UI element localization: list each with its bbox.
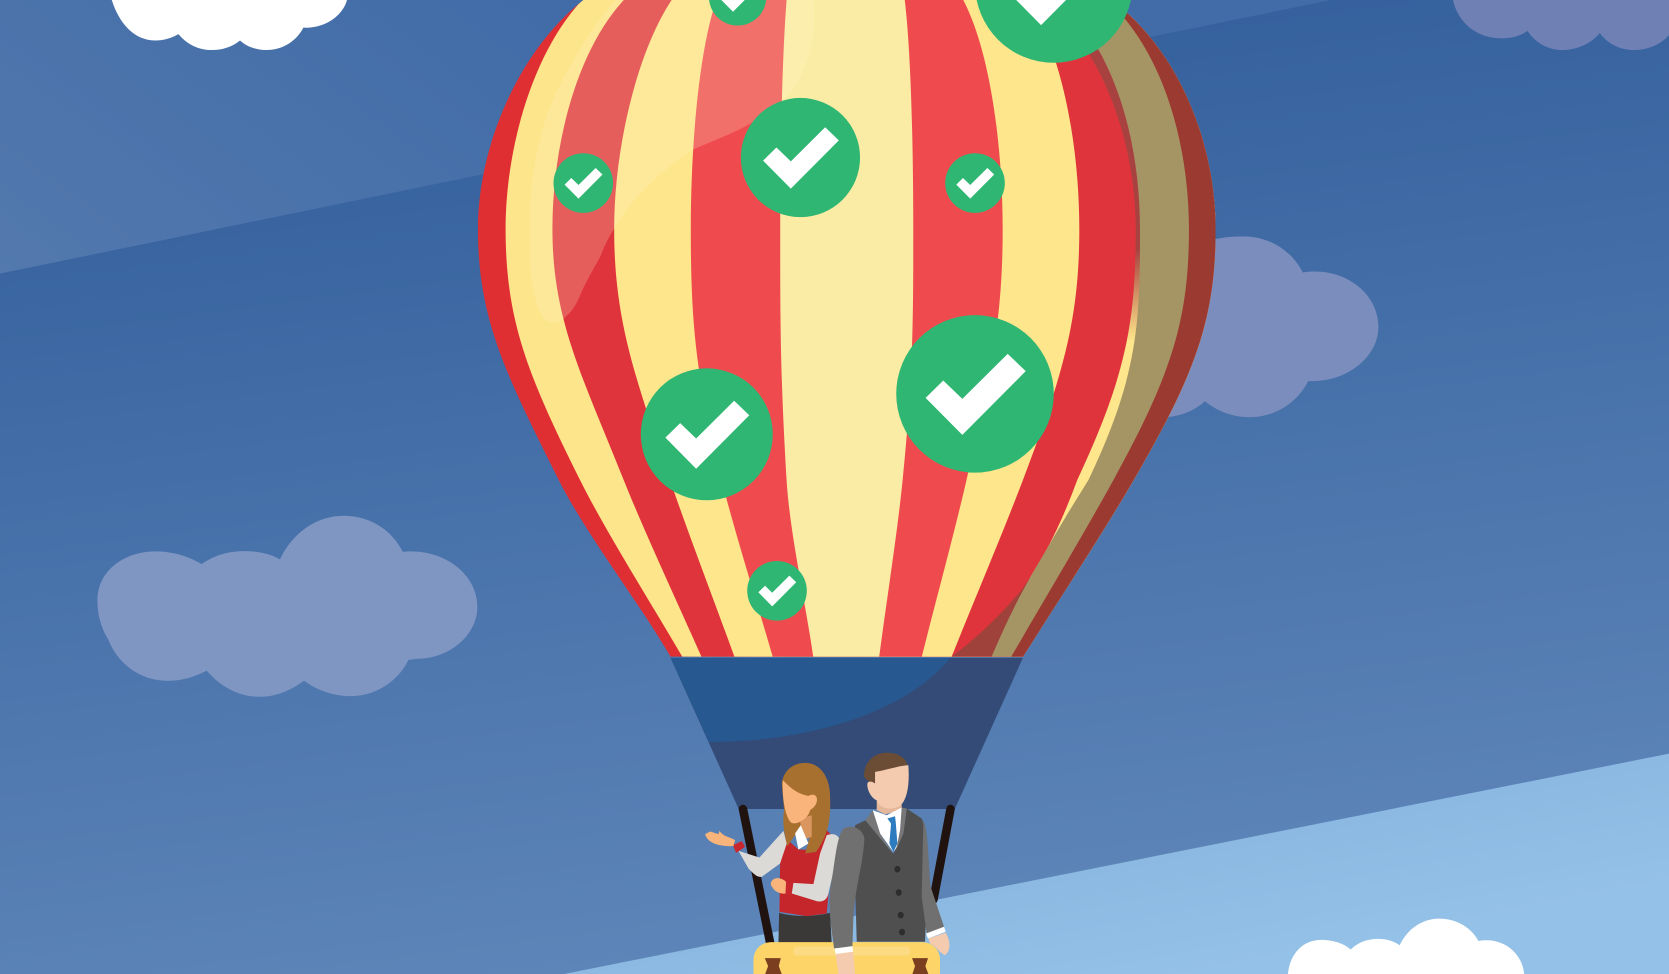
- check badge: [553, 153, 613, 213]
- woman: [705, 763, 840, 943]
- check badge: [896, 315, 1054, 473]
- balloon collar: [671, 658, 1023, 809]
- basket: [753, 942, 940, 974]
- cloud: top left white: [112, 0, 347, 50]
- background band: lower right: [564, 754, 1669, 974]
- cloud: top right: [1453, 0, 1669, 50]
- people and basket: [705, 753, 949, 974]
- check badge: [975, 0, 1133, 63]
- cloud: left: [97, 516, 477, 697]
- cloud: bottom right white: [1288, 919, 1524, 974]
- cloud: right behind balloon: [1160, 236, 1378, 417]
- balloon envelope: [468, 0, 1277, 665]
- check badge: [741, 98, 860, 217]
- check badge: [945, 153, 1005, 213]
- ropes: [743, 809, 951, 945]
- man torso: [855, 753, 928, 942]
- check badge: [641, 368, 773, 500]
- background band: upper left: [0, 0, 1331, 274]
- check badge: [709, 0, 766, 26]
- man arms: [830, 820, 949, 974]
- check badge: [747, 561, 807, 621]
